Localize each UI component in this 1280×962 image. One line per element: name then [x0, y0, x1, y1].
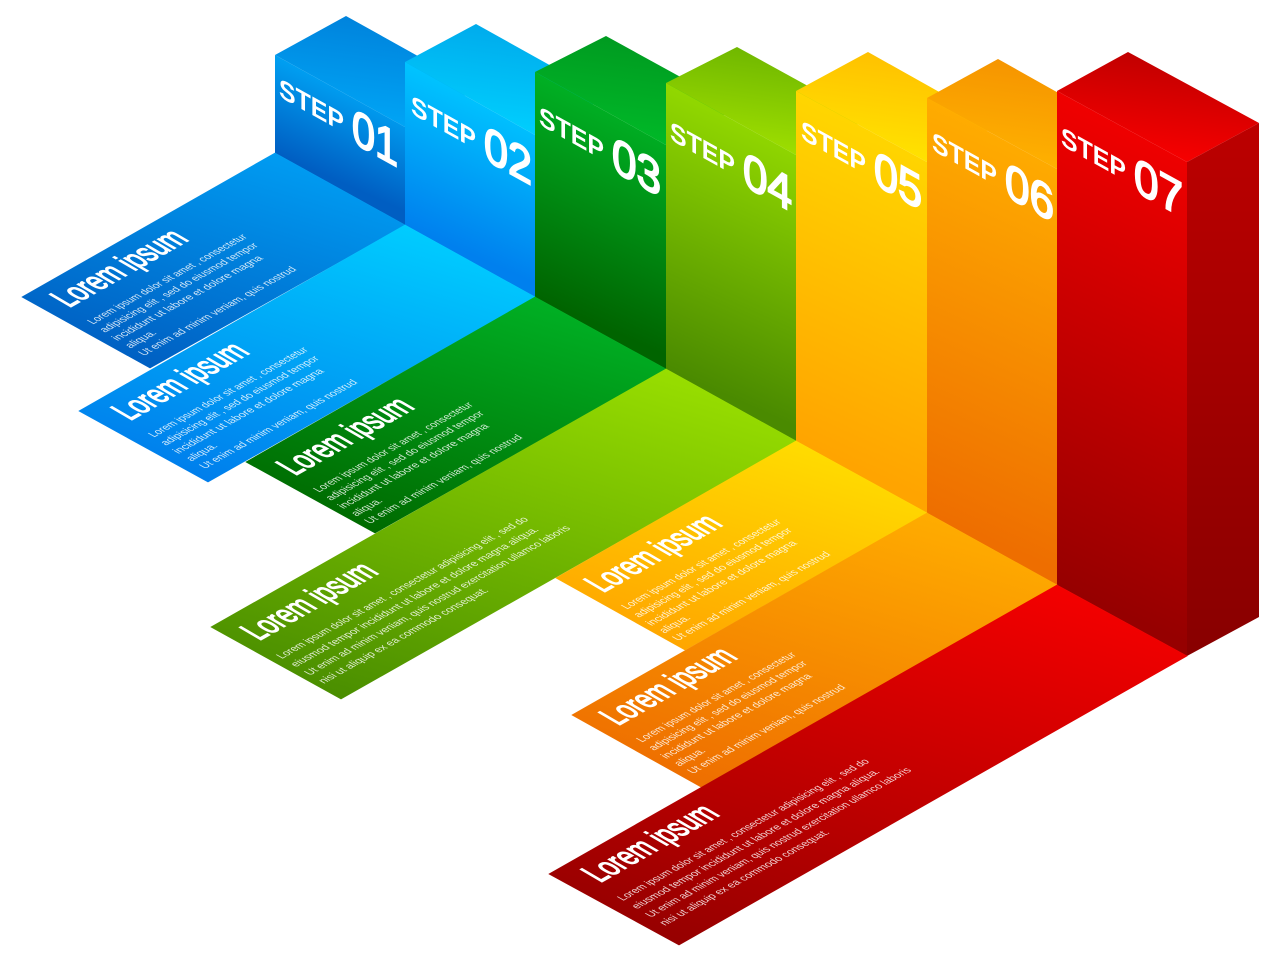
- body text: adipisicing elit , sed do eiusmod tempor: [323, 409, 488, 502]
- panel: step 03 floor: [246, 297, 666, 533]
- body text: aliqua.: [671, 747, 709, 768]
- text block: step 04: [231, 515, 574, 685]
- label: step 05: [801, 100, 922, 222]
- label: step 07: [1061, 106, 1183, 229]
- body text: adipisicing elit , sed do eiusmod tempor: [158, 354, 323, 447]
- body text: [311, 401, 526, 526]
- panel: step 05 column: [796, 52, 998, 513]
- panel: step 02 floor: [79, 225, 535, 482]
- label: step 01: 01: [352, 98, 398, 179]
- label: step 07: STEP: [1061, 122, 1126, 188]
- body text: aliqua.: [348, 497, 386, 518]
- panel: step 02 column: [405, 24, 607, 297]
- body text: incididunt ut labore et dolore magna: [643, 539, 801, 628]
- panel: step 04 floor: [211, 369, 796, 699]
- panel: step 01 column: [275, 16, 477, 225]
- column 04 top face: [666, 47, 868, 155]
- body text: aliqua.: [122, 329, 160, 350]
- label: step 01: STEP: [279, 73, 344, 139]
- panel: step 03 column: [535, 36, 737, 369]
- heading: Lorem ipsum: [575, 509, 731, 597]
- column 06 front face: [927, 98, 1057, 585]
- column 01 front face: [275, 55, 405, 225]
- body text: Lorem ipsum dolor sit amet , consectetur adipisicing elit , sed do: [274, 515, 532, 661]
- panel: step 07 floor: [549, 585, 1187, 945]
- column 02 front face: [405, 62, 535, 297]
- body text: incididunt ut labore et dolore magna: [170, 367, 328, 456]
- column 05 front face: [796, 91, 927, 513]
- column 02 top face: [405, 24, 607, 135]
- panel: step 04 column: [666, 47, 868, 441]
- panel: step 05 floor: [556, 441, 927, 650]
- body text: Ut enim ad minim veniam, quis nostrud exercitation ullamco laboris: [643, 766, 915, 919]
- text block: step 02: [102, 337, 361, 471]
- label: step 04: STEP: [670, 116, 735, 182]
- body text: incididunt ut labore et dolore magna: [335, 422, 493, 511]
- column 07 top face: [1057, 52, 1259, 162]
- panel: step 07 column: [1057, 52, 1259, 656]
- column 04 front face: [666, 83, 796, 441]
- label: step 03: [539, 86, 661, 208]
- heading: Lorem ipsum: [267, 392, 423, 480]
- body text: Ut enim ad minim veniam, quis nostrud: [362, 433, 526, 526]
- label: step 06: 06: [1005, 152, 1054, 234]
- body text: adipisicing elit , sed do eiusmod tempor: [646, 659, 811, 752]
- body text: Lorem ipsum dolor sit amet , consectetur: [311, 401, 477, 494]
- body text: Lorem ipsum dolor sit amet , consectetur: [619, 518, 785, 611]
- body text: [146, 346, 361, 471]
- text block: step 05: [575, 509, 834, 643]
- body text: Lorem ipsum dolor sit amet , consectetur: [634, 651, 800, 744]
- label: step 02: [411, 75, 532, 197]
- label: step 07: 07: [1134, 147, 1183, 229]
- text block: step 06: [590, 642, 849, 776]
- label: step 04: [670, 101, 792, 223]
- column 03 front face: [535, 72, 666, 369]
- panel: step 06 column: [927, 59, 1128, 585]
- label: step 06: STEP: [932, 127, 997, 193]
- body text: Ut enim ad minim veniam, quis nostrud: [197, 378, 361, 471]
- body text: Ut enim ad minim veniam, quis nostrud: [685, 683, 849, 776]
- text block: step 03: [267, 392, 526, 526]
- body text: adipisicing elit , sed do eiusmod tempor: [631, 526, 796, 619]
- body text: [619, 518, 834, 643]
- text block: step 01: [41, 224, 300, 358]
- label: step 01: [279, 58, 398, 179]
- body text: Lorem ipsum dolor sit amet , consectetur adipisicing elit , sed do: [615, 757, 873, 903]
- body text: aliqua.: [656, 614, 694, 635]
- body text: [634, 651, 849, 776]
- body text: nisi ut aliquip ex ea commodo consequat.: [316, 586, 492, 685]
- panel: step 06 floor: [572, 513, 1057, 787]
- body text: Ut enim ad minim veniam, quis nostrud exercitation ullamco laboris: [302, 524, 574, 677]
- column 07 front face: [1057, 91, 1187, 656]
- column 03 top face: [535, 36, 737, 145]
- label: step 03: STEP: [539, 101, 604, 167]
- heading: Lorem ipsum: [102, 337, 258, 425]
- body text: nisi ut aliquip ex ea commodo consequat.: [657, 828, 833, 927]
- body text: Lorem ipsum dolor sit amet , consectetur: [146, 346, 312, 439]
- label: step 03: 03: [612, 126, 661, 208]
- body text: adipisicing elit , sed do eiusmod tempor: [97, 241, 262, 334]
- column 07 side face: [1187, 123, 1259, 656]
- heading: Lorem ipsum: [590, 642, 746, 730]
- body text: aliqua.: [183, 442, 221, 463]
- label: step 02: STEP: [411, 90, 476, 156]
- body text: Ut enim ad minim veniam, quis nostrud: [670, 550, 834, 643]
- text block: step 07: [572, 757, 915, 927]
- body text: eiusmod tempor incididunt ut labore et dolore magna aliqua.: [629, 768, 883, 911]
- heading: Lorem ipsum: [41, 224, 197, 312]
- label: step 04: 04: [743, 141, 792, 223]
- panel: step 01 floor: [22, 153, 405, 368]
- body text: incididunt ut labore et dolore magna: [109, 254, 267, 343]
- column 06 top face: [927, 59, 1128, 169]
- column 01 top face: [275, 16, 477, 127]
- body text: incididunt ut labore et dolore magna: [658, 672, 816, 761]
- label: step 05: STEP: [801, 115, 866, 181]
- heading: Lorem ipsum: [231, 557, 387, 645]
- column 05 top face: [796, 52, 998, 162]
- label: step 05: 05: [874, 140, 922, 222]
- body text: Ut enim ad minim veniam, quis nostrud: [136, 265, 300, 358]
- body text: eiusmod tempor incididunt ut labore et dolore magna aliqua.: [288, 526, 542, 669]
- heading: Lorem ipsum: [572, 799, 728, 887]
- body text: Lorem ipsum dolor sit amet , consectetur: [85, 233, 251, 326]
- label: step 06: [932, 111, 1054, 234]
- body text: [85, 233, 300, 358]
- label: step 02: 02: [484, 115, 532, 197]
